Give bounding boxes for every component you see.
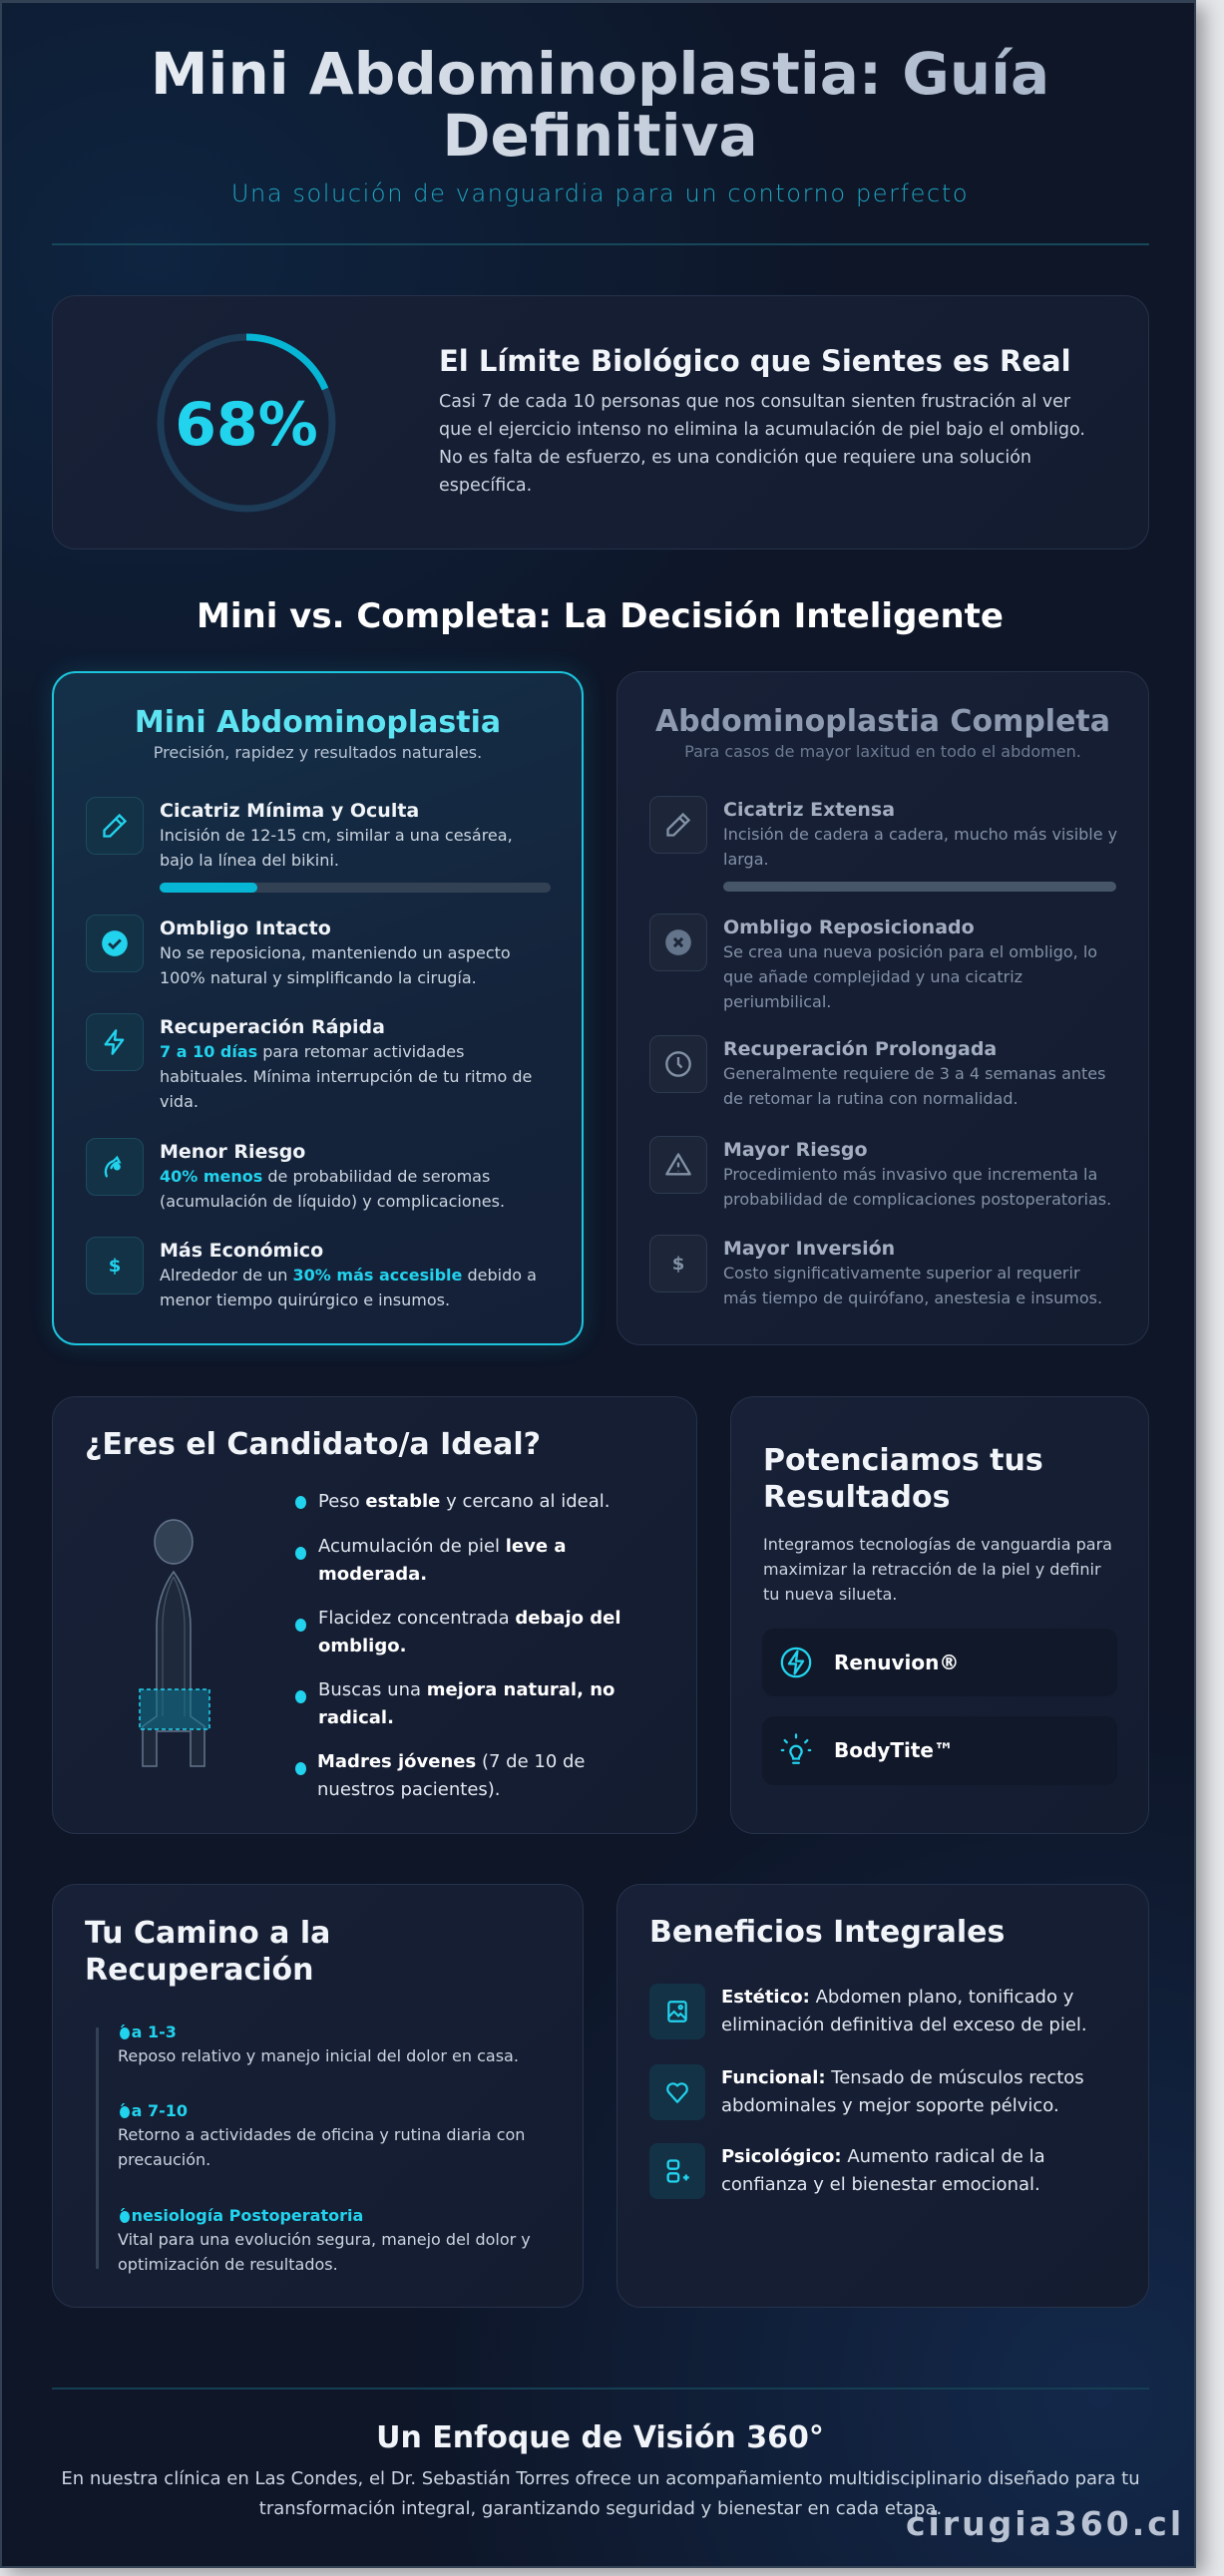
- panel: mini abdominoplastia: Más Económico: [160, 1240, 323, 1262]
- list: candidate criteria: Acumulación de piel leve a moderada.: [318, 1536, 567, 1585]
- item: scar: [86, 797, 551, 893]
- item: navel: [86, 915, 511, 987]
- panel: full abdominoplastia: Para casos de mayor laxitud en todo el abdomen.: [684, 742, 1081, 761]
- panel: mini abdominoplastia: Alrededor de un 30% más accesible debido a menor tiempo quirúrgico e insumos.: [160, 1266, 537, 1309]
- bar: scar length: [160, 883, 551, 893]
- panel: mini abdominoplastia: 7 a 10 días para retomar actividades habituales. Mínima interrupción de tu ritmo de vida.: [160, 1042, 532, 1111]
- icon: clock: [649, 1035, 707, 1093]
- panel: mini abdominoplastia: Precisión, rapidez y resultados naturales.: [154, 743, 482, 762]
- heading: comparison: Mini vs. Completa: La Decisión Inteligente: [197, 596, 1004, 636]
- list: candidate criteria: Peso estable y cercano al ideal.: [318, 1491, 611, 1512]
- icon: dollar: $: [672, 1253, 684, 1275]
- timeline: day 1-3: Reposo relativo y manejo inicial del dolor en casa.: [118, 2046, 519, 2065]
- icon: warning: [649, 1136, 707, 1194]
- item: scar: [649, 796, 1117, 892]
- heading: Abdominoplastia Completa: [655, 704, 1110, 739]
- heading: biological limit: El Límite Biológico que Sientes es Real: [439, 344, 1071, 378]
- brand: cirugia360.cl: cirugia360.cl: [906, 2504, 1184, 2543]
- icon: body figure: [139, 1519, 210, 1767]
- list: candidate criteria: Buscas una mejora natural, no radical.: [318, 1679, 614, 1728]
- chart: ring 68%: 68%: [175, 390, 318, 460]
- icon: heart: [649, 2064, 705, 2120]
- icon: x: [649, 914, 707, 971]
- timeline: day 7-10: [118, 2101, 525, 2169]
- heading: Mini Abdominoplastia: [135, 705, 501, 740]
- list: candidate criteria: Flacidez concentrada debajo del ombligo.: [318, 1608, 621, 1656]
- tech: Renuvion: [762, 1629, 1117, 1696]
- panel: stat 68%: [52, 295, 1149, 550]
- heading: ¿Eres el Candidato/a Ideal?: [85, 1427, 541, 1462]
- text block: footer: En nuestra clínica en Las Condes, el Dr. Sebastián Torres ofrece un acompañamiento multidisciplinario diseñado para tu transformación integral, garantizando seguridad y bienestar en cada etapa.: [61, 2468, 1140, 2519]
- benefit: aesthetic: Estético: Abdomen plano, tonificado y eliminación definitiva del exceso de piel.: [721, 1987, 1087, 2035]
- panel: full abdominoplastia: Mayor Riesgo: [723, 1139, 868, 1161]
- bar: scar length: [723, 882, 1116, 892]
- timeline: kinesiology: ´ nesiología Postoperatoria: [118, 2206, 363, 2225]
- panel: mini abdominoplastia: Incisión de 12-15 cm, similar a una cesárea, bajo la línea del bikini.: [160, 826, 513, 870]
- tech: BodyTite: [762, 1716, 1117, 1785]
- timeline: day 7-10: ´ a 7-10: [118, 2101, 188, 2120]
- icon: check: [86, 915, 144, 972]
- icon: bulb: [780, 1733, 812, 1764]
- item: recovery: [86, 1013, 532, 1111]
- panel: full abdominoplastia: Se crea una nueva posición para el ombligo, lo que añade complejidad y una cicatriz periumbilical.: [723, 942, 1097, 1011]
- item: cost: [649, 1235, 1102, 1307]
- icon: dollar: [86, 1237, 144, 1294]
- text block: Casi 7 de cada 10 personas que nos consultan sienten frustración al ver que el ejercicio intenso no elimina la acumulación de piel bajo el ombligo. No es falta de esfuerzo, es una condición que requiere una solución específica.: [439, 392, 1085, 496]
- icon: lightning: [86, 1013, 144, 1071]
- item: risk: [86, 1138, 505, 1211]
- icon: shield: [86, 1138, 144, 1196]
- panel: mini abdominoplastia: Ombligo Intacto: [160, 918, 331, 939]
- panel: full abdominoplastia: Recuperación Prolongada: [723, 1038, 997, 1060]
- heading: 360 vision: Un Enfoque de Visión 360°: [376, 2420, 824, 2455]
- heading: Beneficios Integrales: [649, 1915, 1005, 1950]
- subtitle: Una solución de vanguardia para un contorno perfecto: [231, 180, 969, 207]
- icon: toggles: [649, 2143, 705, 2199]
- panel: ideal candidate: [52, 1396, 697, 1834]
- timeline: kinesiology: Vital para una evolución segura, manejo del dolor y optimización de resultados.: [118, 2230, 531, 2274]
- panel: full abdominoplastia: [616, 671, 1149, 1345]
- panel: mini abdominoplastia: [52, 671, 584, 1345]
- panel: recovery path: [52, 1884, 584, 2308]
- panel: integral benefits: [616, 1884, 1149, 2308]
- icon: pencil: [649, 796, 707, 854]
- timeline: kinesiology: [118, 2206, 531, 2274]
- list: candidate criteria: [295, 1491, 621, 1800]
- panel: mini abdominoplastia: Menor Riesgo: [160, 1141, 305, 1163]
- benefit: functional: Funcional: Tensado de músculos rectos abdominales y mejor soporte pélvico.: [721, 2067, 1084, 2116]
- icon: bolt circle: [780, 1648, 812, 1677]
- timeline: day 1-3: ´ a 1-3: [118, 2023, 177, 2041]
- item: recovery: [649, 1035, 1105, 1108]
- item: cost: [86, 1237, 537, 1309]
- benefit: psychological: Psicológico: Aumento radical de la confianza y el bienestar emocional.: [721, 2146, 1045, 2195]
- panel: mini abdominoplastia: Cicatriz Mínima y Oculta: [160, 800, 419, 822]
- list: candidate criteria: Madres jóvenes (7 de 10 de nuestros pacientes).: [317, 1751, 585, 1800]
- tech: BodyTite: BodyTite™: [834, 1738, 954, 1762]
- icon: pencil: [86, 797, 144, 855]
- icon: dollar: [649, 1235, 707, 1292]
- panel: full abdominoplastia: Procedimiento más invasivo que incrementa la probabilidad de complicaciones postoperatorias.: [723, 1165, 1111, 1209]
- icon: dollar: $: [109, 1255, 121, 1277]
- tech: Renuvion: Renuvion®: [834, 1651, 959, 1674]
- panel: full abdominoplastia: Incisión de cadera a cadera, mucho más visible y larga.: [723, 825, 1117, 869]
- panel: mini abdominoplastia: No se reposiciona, manteniendo un aspecto 100% natural y simplificando la cirugía.: [160, 943, 511, 987]
- item: navel: [649, 914, 1097, 1011]
- icon: image: [649, 1984, 705, 2039]
- heading: Potenciamos tus Resultados: [763, 1443, 1043, 1515]
- timeline: day 7-10: Retorno a actividades de oficina y rutina diaria con precaución.: [118, 2125, 525, 2169]
- text block: Integramos tecnologías de vanguardia para maximizar la retracción de la piel y definir tu nueva silueta.: [763, 1535, 1112, 1604]
- chart: ring 68%: [158, 333, 335, 513]
- panel: mini abdominoplastia: Recuperación Rápida: [160, 1016, 385, 1038]
- panel: full abdominoplastia: Ombligo Reposicionado: [723, 917, 975, 938]
- panel: mini abdominoplastia: 40% menos de probabilidad de seromas (acumulación de líquido) y complicaciones.: [160, 1167, 505, 1211]
- panel: technologies: [730, 1396, 1149, 1834]
- panel: full abdominoplastia: Costo significativamente superior al requerir más tiempo de quirófano, anestesia e insumos.: [723, 1264, 1102, 1307]
- panel: full abdominoplastia: Cicatriz Extensa: [723, 799, 895, 821]
- title: Mini Abdominoplastia: Guía Definitiva: [151, 40, 1049, 170]
- item: risk: [649, 1136, 1111, 1209]
- panel: full abdominoplastia: Generalmente requiere de 3 a 4 semanas antes de retomar la rutina con normalidad.: [723, 1064, 1105, 1108]
- timeline: day 1-3: [118, 2023, 519, 2065]
- heading: Tu Camino a la Recuperación: [85, 1916, 330, 1988]
- panel: full abdominoplastia: Mayor Inversión: [723, 1238, 895, 1260]
